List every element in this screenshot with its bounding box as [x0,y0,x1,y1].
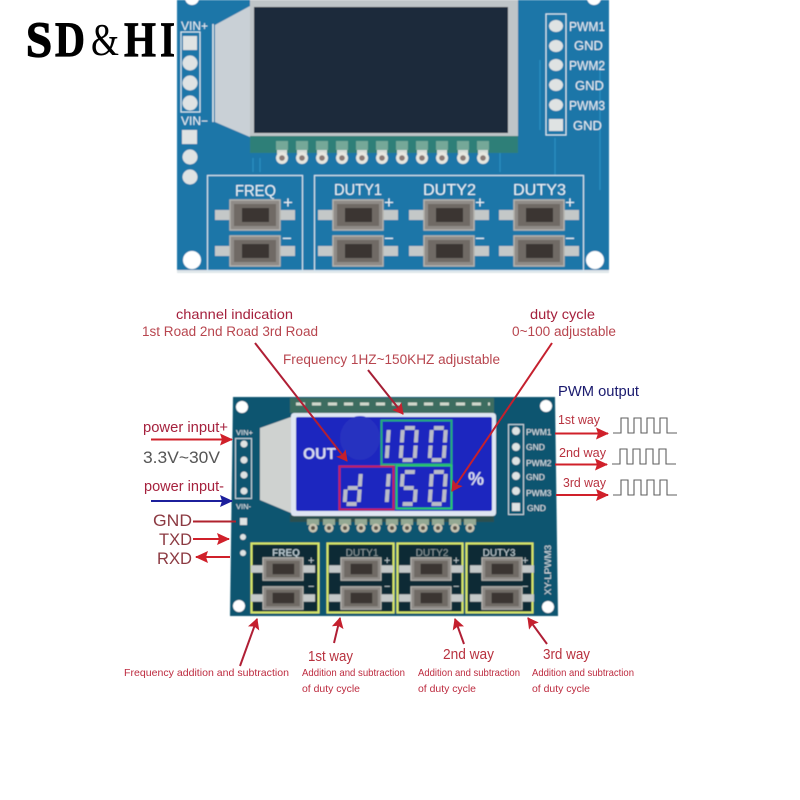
callout: 2nd way keys [418,619,520,695]
mounting holes [233,400,554,613]
button group: FREQ: − [282,229,292,248]
LCD module blank [213,0,518,153]
LCD top connector [290,398,494,413]
digits d1 50 [345,472,446,504]
GND label: GND [153,511,192,530]
brand logo: SD&HI: & [91,14,119,65]
button group: DUTY1 DUTY2 DUTY3: DUTY3 [513,182,566,199]
callout: 1st way keys [302,618,405,695]
button group: DUTY1 DUTY2 DUTY3: DUTY2 [423,182,476,199]
power input minus: power input- [144,479,224,495]
button group: DUTY1 DUTY2 DUTY3: DUTY1 [334,182,382,199]
power pins VIN: VIN− [181,114,208,128]
brand logo: SD&HI: D [55,11,85,67]
callout: 1st way keys: 1st way [308,649,354,665]
brand logo: SD&HI: S [26,11,52,67]
button group: FREQ [208,176,302,270]
key group FREQ: + [308,555,314,567]
PWM output pins: PWM2 [569,58,605,73]
GND label [153,511,236,530]
output 2: arrow and waveform: 2nd way [559,445,606,460]
callout: 2nd way keys: 2nd way [443,647,495,663]
key group FREQ [251,544,318,612]
callout: 3rd way keys: of duty cycle [532,683,590,695]
LCD side flex [260,417,291,513]
mounting holes [183,0,604,269]
button group: DUTY1 DUTY2 DUTY3: − [384,229,394,248]
output 2: arrow and waveform [555,445,676,464]
key group DUTY1: − [384,581,390,593]
callout: 2nd way keys: Addition and subtraction [418,667,520,679]
PWM output pins [546,14,605,135]
channel highlight box [340,466,394,510]
model label: XY-LPWM3 [543,545,553,595]
key group DUTY3 [466,544,534,612]
button group: FREQ: + [283,193,293,212]
OUT label: OUT [303,446,336,463]
key group DUTY2: + [453,555,459,567]
key group DUTY1 [328,544,394,612]
brand logo: SD&HI: I [160,11,175,67]
button group: FREQ: FREQ [235,183,276,200]
key group DUTY2 [398,544,463,612]
callout: channel indication: channel indication [176,306,293,322]
callout: 1st way keys: Addition and subtraction [302,667,405,679]
key group FREQ: FREQ [272,548,300,559]
button group: DUTY1 DUTY2 DUTY3: + [565,193,575,212]
PWM output pins: PWM1 [569,19,605,34]
PWM pins: PWM1 [526,427,552,437]
callout: 3rd way keys: Addition and subtraction [532,667,634,679]
key group FREQ: − [308,581,314,593]
power pins: VIN+ [236,428,254,437]
PWM pins: GND [527,503,546,513]
button group: DUTY1 DUTY2 DUTY3: − [475,229,485,248]
button group: DUTY1 DUTY2 DUTY3 [314,176,584,270]
callout: frequency: Frequency 1HZ~150KHZ adjustable [283,352,500,367]
callout: duty cycle [452,306,616,491]
output 3: arrow and waveform: 3rd way [563,475,606,490]
PWM pins: GND [526,442,545,452]
output 1: arrow and waveform: 1st way [558,412,600,427]
frequency highlight box [382,420,452,464]
output 1: arrow and waveform [555,412,677,434]
TXD label [159,530,229,549]
button group: DUTY1 DUTY2 DUTY3: − [565,229,575,248]
PWM output pins: GND [575,78,604,93]
key group DUTY3: DUTY3 [483,548,516,559]
power pins [236,428,254,556]
power pins: VIN- [236,502,252,511]
PWM pins: PWM3 [526,488,552,498]
button group: DUTY1 DUTY2 DUTY3: + [384,193,394,212]
PWM output pins: PWM3 [569,98,605,113]
callout: 2nd way keys: of duty cycle [418,683,476,695]
callout: frequency [283,352,500,414]
brand logo: SD&HI: H [124,11,156,67]
RXD label: RXD [157,549,192,568]
key group DUTY1: + [384,555,390,567]
LCD bottom connector [290,515,494,532]
callout: channel indication: 1st Road 2nd Road 3rd Road [142,324,318,339]
PWM output heading: PWM output [558,384,639,400]
power pins VIN [181,19,208,184]
LCD frame [291,413,496,516]
PWM pins: GND [526,472,545,482]
callout: 1st way keys: of duty cycle [302,683,360,695]
callout: frequency keys: Frequency addition and subtraction [124,667,289,679]
key group DUTY2: − [453,581,459,593]
PWM output pins: GND [573,118,602,133]
callout: duty cycle: duty cycle [530,306,595,322]
PWM output pins: GND [574,38,603,53]
key group DUTY3: + [522,555,528,567]
key group DUTY3: − [522,581,528,593]
brand logo: SD&HI [26,11,175,67]
callout: channel indication [142,306,347,461]
TXD label: TXD [159,530,192,549]
button group: DUTY1 DUTY2 DUTY3: + [475,193,485,212]
digits 100 [387,428,446,460]
power pins VIN: VIN+ [181,19,208,33]
duty highlight box [396,466,452,508]
LCD blue screen [296,416,492,511]
callout: frequency keys [124,619,289,679]
percent sign: % [468,469,484,489]
PWM pins [508,424,552,514]
callout: duty cycle: 0~100 adjustable [512,324,616,339]
LCD connector pads [276,141,489,164]
RXD label [157,549,230,568]
PWM pins: PWM2 [526,458,552,468]
callout: 3rd way keys: 3rd way [543,647,591,663]
top circuit board photo [177,0,609,273]
key group DUTY1: DUTY1 [346,548,379,559]
callout: 3rd way keys [528,618,634,695]
power input minus [144,479,232,501]
power input plus: power input+ [143,420,228,436]
output 3: arrow and waveform [556,475,677,495]
voltage range: 3.3V~30V [143,448,221,467]
bottom annotated circuit board [230,397,558,616]
key group DUTY2: DUTY2 [416,548,449,559]
